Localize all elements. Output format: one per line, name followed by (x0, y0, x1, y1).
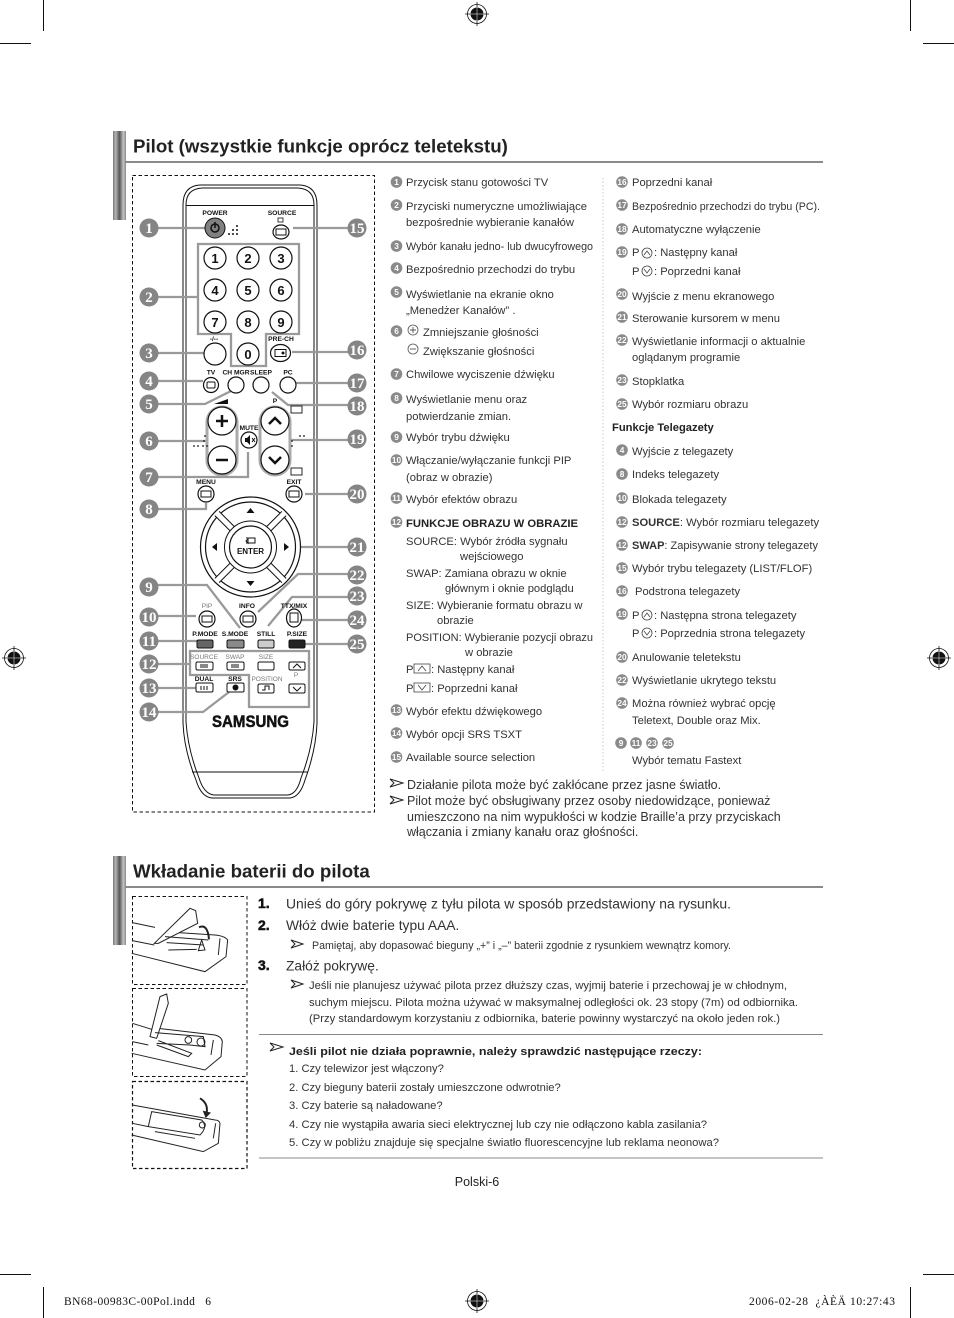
button labels: P (294, 672, 298, 679)
text block: troubleshooting: 2. Czy bieguny baterii zostały umieszczone odwrotnie? (289, 1082, 561, 1094)
text block: left column legend: Wyświetlanie menu oraz (406, 394, 528, 406)
text block: left column legend: potwierdzanie zmian. (406, 411, 511, 423)
text block: right column legend: : Poprzednia strona telegazety (654, 628, 806, 640)
callout numbers left: 4 (145, 374, 153, 390)
text block: right column legend: 18 (617, 224, 627, 234)
text block: battery steps: 1. (258, 895, 270, 911)
button labels: -/-- (210, 336, 218, 343)
button labels: SWAP (226, 654, 244, 661)
text block: battery steps: Załóż pokrywę. (286, 958, 379, 974)
callout numbers left: 2 (145, 290, 153, 306)
text block: right column legend: 25 (663, 738, 673, 748)
text block: left column legend: Wyświetlanie na ekranie okno (406, 289, 554, 301)
navigation ring (200, 497, 300, 597)
text block: left column legend: 2 (394, 200, 399, 210)
callout numbers left: 1 (145, 221, 153, 237)
text block: troubleshooting (270, 1043, 719, 1149)
text block: right column legend: Wybór trybu telegazety (LIST/FLOF) (632, 563, 812, 575)
text block: right column legend: 23 (647, 738, 657, 748)
number pad outline (198, 244, 299, 366)
button labels: SIZE (259, 654, 274, 661)
callout numbers right: 15 (350, 221, 364, 237)
text block: right column legend: 16 (617, 586, 627, 596)
text block: troubleshooting: 5. Czy w pobliżu znajduje się specjalne światło fluorescencyjne lub reklama neonowa? (289, 1137, 719, 1149)
callout numbers left: 11 (142, 634, 156, 650)
button labels: PRE-CH (268, 336, 294, 343)
text block: right column legend: Indeks telegazety (632, 469, 719, 481)
panel: remote control diagram (132, 176, 374, 812)
text block: right column legend: Funkcje Telegazety (612, 422, 715, 434)
number buttons: 2 (244, 251, 252, 266)
volume rocker (193, 399, 237, 475)
text block: left column legend: 7 (394, 369, 399, 379)
text block: left column legend: POSITION: Wybieranie pozycji obrazu (406, 632, 593, 644)
text block: right column legend: Stopklatka (632, 376, 685, 388)
callout numbers right: 18 (350, 399, 364, 415)
text block: left column legend: 3 (394, 241, 399, 251)
button labels: P.MODE (192, 631, 218, 638)
callout numbers right: 16 (350, 343, 365, 359)
callout numbers right: 25 (350, 637, 364, 653)
text block: right column legend: Wybór rozmiaru obrazu (632, 399, 748, 411)
text block: left column legend: „Menedżer Kanałów” . (406, 305, 515, 317)
callout numbers left: 3 (145, 346, 153, 362)
button labels: STILL (257, 631, 275, 638)
button labels: INFO (239, 603, 255, 610)
text block: left column legend: 6 (394, 326, 399, 336)
text block: left column legend: 14 (392, 728, 401, 738)
text block: battery steps (258, 895, 798, 1025)
text block: right column legend: P (632, 247, 639, 259)
text block: right column legend: Anulowanie teletekstu (632, 652, 741, 664)
button labels: SOURCE (190, 654, 219, 661)
text block: troubleshooting: 1. Czy telewizor jest włączony? (289, 1063, 444, 1075)
text block: right column legend: 9 (619, 738, 624, 748)
callout numbers right: 21 (350, 540, 364, 556)
number buttons: 9 (277, 315, 285, 330)
text block: right column legend: 19 (617, 247, 627, 257)
text block: left column legend: Włączanie/wyłączanie funkcji PIP (406, 455, 571, 467)
text block: right column legend: SOURCE: Wybór rozmiaru telegazety (632, 517, 819, 529)
text block: left column legend: SWAP: Zamiana obrazu w oknie (406, 568, 567, 580)
text block: left column legend: Wybór trybu dźwięku (406, 432, 510, 444)
round buttons: PIP, INFO, TTX (199, 609, 302, 627)
text block: left column legend: Przyciski numeryczne umożliwiające (406, 201, 587, 213)
text block: troubleshooting: 3. Czy baterie są naładowane? (289, 1100, 443, 1112)
button labels: EXIT (287, 479, 302, 486)
text block: left column legend: Bezpośrednio przechodzi do trybu (406, 264, 575, 276)
text block: left column legend: obrazie (437, 615, 474, 627)
text block: battery steps: Unieś do góry pokrywę z tyłu pilota w sposób przedstawiony na rysunku. (286, 896, 731, 912)
text block: left column legend: Przycisk stanu gotowości TV (406, 177, 549, 189)
leader lines (158, 228, 348, 712)
callout numbers left (140, 218, 158, 722)
number buttons: 8 (244, 315, 252, 330)
text block: right column legend: Wyświetlanie informacji o aktualnie (632, 336, 805, 348)
button labels: P.SIZE (287, 631, 308, 638)
text block: left column legend: 5 (394, 287, 399, 297)
print slug left: BN68-00983C-00Pol.indd 6 (64, 1296, 211, 1308)
illustration: inserting batteries (132, 988, 247, 1076)
text block: left column legend: Available source selection (406, 752, 535, 764)
text block: remote usage notes: Działanie pilota może być zakłócane przez jasne światło. (407, 778, 721, 792)
text block: right column legend: 23 (617, 375, 627, 385)
callout numbers left: 9 (145, 580, 153, 596)
text block: right column legend: Wybór tematu Fastext (632, 755, 742, 767)
text block: right column legend (612, 176, 820, 767)
text block: right column legend: 22 (617, 675, 627, 685)
text block: troubleshooting: 4. Czy nie wystąpiła awaria sieci elektrycznej lub czy nie odłączono kabla zasilania? (289, 1119, 707, 1131)
text block: right column legend: 12 (617, 517, 627, 527)
text block: left column legend: Zmniejszanie głośności (423, 327, 539, 339)
text block: right column legend: 21 (617, 312, 627, 322)
text block: left column legend: Wybór opcji SRS TSXT (406, 729, 522, 741)
number buttons: 0 (244, 347, 252, 362)
text block: right column legend: Blokada telegazety (632, 494, 727, 506)
button labels: S.MODE (222, 631, 249, 638)
button labels: TTX/MIX (281, 603, 308, 610)
text block: remote usage notes (390, 778, 781, 839)
text block: left column legend: (obraz w obrazie) (406, 472, 493, 484)
button: exit (286, 486, 302, 502)
text block: left column legend: Wybór efektu dźwiękowego (406, 706, 542, 718)
callout numbers right (348, 218, 366, 654)
button: source (273, 218, 289, 239)
button labels: SLEEP (250, 370, 272, 376)
button labels (190, 210, 308, 683)
registration mark: left (2, 646, 26, 670)
button labels: DUAL (195, 676, 213, 683)
rectangular buttons (196, 640, 305, 693)
button labels: SOURCE (268, 210, 297, 217)
text block: battery steps: Pamiętaj, aby dopasować bieguny „+” i „–” baterii zgodnie z rysunkiem wewnątrz komory. (312, 940, 731, 952)
text block: left column legend: Zwiększanie głośności (423, 346, 534, 358)
heading: remote section (113, 131, 823, 220)
button labels: MENU (196, 479, 216, 486)
text block: left column legend: głównym i oknie podglądu (445, 583, 574, 595)
text block: remote usage notes: umieszczono na nim wypukłości w kodzie Braille’a przy przyciskach (407, 810, 781, 824)
text block: right column legend: Bezpośrednio przechodzi do trybu (PC). (632, 201, 820, 213)
registration mark: bottom (465, 1289, 489, 1313)
number buttons: 5 (244, 283, 252, 298)
text block: left column legend: Chwilowe wyciszenie dźwięku (406, 369, 555, 381)
number buttons: 1 (211, 251, 219, 266)
text block: right column legend: Wyświetlanie ukrytego tekstu (632, 675, 776, 687)
text block: right column legend: Teletext, Double oraz Mix. (632, 715, 761, 727)
text block: right column legend: P (632, 266, 639, 278)
text block: left column legend (391, 176, 593, 764)
text block: left column legend: 4 (394, 263, 399, 273)
callout numbers right: 19 (350, 432, 364, 448)
callout numbers right: 23 (350, 589, 364, 605)
text block: left column legend: 13 (392, 705, 401, 715)
text block: right column legend: P (632, 628, 639, 640)
text block: right column legend: 20 (617, 652, 627, 662)
text block: right column legend: Wyjście z telegazety (632, 446, 734, 458)
text block: left column legend: : Poprzedni kanał (431, 683, 518, 695)
text block: left column legend: 9 (394, 432, 399, 442)
text block: left column legend: 8 (394, 393, 399, 403)
text block: right column legend: SWAP: Zapisywanie strony telegazety (632, 540, 818, 552)
registration mark: right (927, 646, 951, 670)
text block: right column legend: 24 (617, 698, 627, 708)
button labels: POSITION (251, 676, 283, 683)
lower buttons outline (190, 651, 309, 707)
callout numbers left: 13 (142, 681, 156, 697)
illustration: opening cover (132, 896, 247, 984)
heading: remote section: Pilot (wszystkie funkcje oprócz teletekstu) (133, 136, 508, 156)
callout numbers right: 20 (350, 487, 364, 503)
text block: right column legend: 10 (617, 493, 627, 503)
text block: right column legend: 11 (632, 738, 641, 748)
text block: right column legend: Poprzedni kanał (632, 177, 713, 189)
button labels: MUTE (240, 425, 259, 432)
callout numbers right: 17 (350, 376, 365, 392)
text block: right column legend: : Poprzedni kanał (654, 266, 741, 278)
small round buttons row (204, 377, 296, 393)
number buttons: 4 (211, 283, 219, 298)
text block: left column legend: P (406, 664, 413, 676)
text block: left column legend: SIZE: Wybieranie formatu obrazu w (406, 600, 583, 612)
page number: Polski-6 (455, 1175, 499, 1189)
heading: batteries section: Wkładanie baterii do pilota (133, 860, 370, 882)
callout numbers left: 5 (145, 397, 153, 413)
text block: left column legend: FUNKCJE OBRAZU W OBRAZIE (406, 518, 579, 530)
text block: right column legend: Sterowanie kursorem w menu (632, 313, 780, 325)
button labels: PC (283, 370, 293, 376)
callout numbers left: 7 (145, 470, 153, 486)
registration mark: top (465, 2, 489, 26)
text block: left column legend: SOURCE: Wybór źródła sygnału (406, 536, 568, 548)
number buttons (204, 247, 292, 365)
text block: right column legend: Automatyczne wyłączenie (632, 224, 761, 236)
text block: left column legend: w obrazie (464, 647, 513, 659)
text block: right column legend: : Następna strona telegazety (654, 610, 797, 622)
text block: right column legend: 22 (617, 335, 627, 345)
button: pre-ch (270, 344, 290, 362)
text block: battery steps: 3. (258, 957, 270, 973)
text block: right column legend: 17 (617, 200, 627, 210)
text block: left column legend: wejściowego (459, 551, 523, 563)
callout numbers left: 12 (142, 657, 156, 673)
text block: right column legend: 15 (617, 563, 627, 573)
button labels: PIP (202, 603, 212, 610)
channel rocker (260, 406, 305, 475)
button: power (205, 218, 238, 238)
button: mute (241, 432, 257, 448)
text block: remote usage notes: włączania i zmiany kanału oraz głośności. (406, 825, 638, 839)
text block: left column legend: Wybór efektów obrazu (406, 494, 517, 506)
text block: right column legend: Wyjście z menu ekranowego (632, 291, 774, 303)
text block: right column legend: oglądanym programie (632, 352, 740, 364)
button labels: TV (207, 370, 216, 376)
text block: right column legend: 16 (617, 177, 627, 187)
button labels: SRS (228, 676, 242, 683)
text block: left column legend: bezpośrednie wybieranie kanałów (406, 217, 575, 229)
number buttons: 7 (211, 315, 219, 330)
number buttons: 3 (277, 251, 285, 266)
callout numbers left: 14 (142, 705, 157, 721)
text block: right column legend: 20 (617, 289, 627, 299)
text block: left column legend: P (406, 683, 413, 695)
text block: left column legend: 11 (392, 493, 401, 503)
callout numbers left: 10 (142, 610, 156, 626)
logo: Samsung: SAMSUNG (212, 713, 289, 731)
text block: right column legend: Podstrona telegazety (635, 586, 741, 598)
text block: left column legend: 10 (392, 455, 401, 465)
text block: battery steps: suchym miejscu. Pilota można używać w maksymalnej odległości ok. 23 stopy (7m) od odbiornika. (309, 997, 798, 1009)
text block: right column legend: Można również wybrać opcję (632, 698, 776, 710)
button labels: P (273, 398, 278, 405)
number buttons: 6 (277, 283, 285, 298)
remote body (183, 185, 317, 798)
text block: left column legend: 12 (392, 517, 401, 527)
text block: battery steps: Jeśli nie planujesz używać pilota przez dłuższy czas, wyjmij baterie i przechowaj je w chłodnym, (309, 980, 787, 992)
button labels: CH MGR (222, 370, 250, 376)
callout numbers left: 8 (145, 502, 153, 518)
callout numbers right: 24 (350, 613, 365, 629)
text block: troubleshooting: Jeśli pilot nie działa poprawnie, należy sprawdzić następujące rzeczy: (289, 1046, 702, 1058)
button labels: POWER (202, 210, 228, 217)
print slug right: 2006-02-28 ¿ÀÈÄ 10:27:43 (749, 1294, 895, 1308)
text block: right column legend: 25 (617, 399, 627, 409)
text block: right column legend: 8 (620, 469, 625, 479)
text block: right column legend: 4 (620, 445, 625, 455)
text block: battery steps: (Przy standardowym korzystaniu z odbiornika, baterie powinny wystarczyć na około jeden rok.) (309, 1013, 780, 1025)
text block: battery steps: 2. (258, 917, 270, 933)
text block: left column legend: 15 (392, 752, 401, 762)
text block: left column legend: 1 (394, 177, 399, 187)
text block: battery steps: Włóż dwie baterie typu AAA. (286, 918, 459, 933)
text block: left column legend: : Następny kanał (431, 664, 515, 676)
callout numbers left: 6 (145, 434, 153, 450)
text block: remote usage notes: Pilot może być obsługiwany przez osoby niedowidzące, ponieważ (407, 794, 770, 808)
illustration: closing cover (132, 1082, 247, 1168)
heading: batteries section (113, 856, 823, 945)
text block: right column legend: 12 (617, 540, 627, 550)
callout numbers right: 22 (350, 568, 364, 584)
text block: right column legend: : Następny kanał (654, 247, 738, 259)
text block: right column legend: P (632, 610, 639, 622)
text block: right column legend: 19 (617, 609, 627, 619)
text block: left column legend: Wybór kanału jedno- lub dwucyfrowego (406, 241, 593, 253)
button: menu (198, 486, 214, 502)
navigation ring: ENTER (237, 547, 264, 556)
